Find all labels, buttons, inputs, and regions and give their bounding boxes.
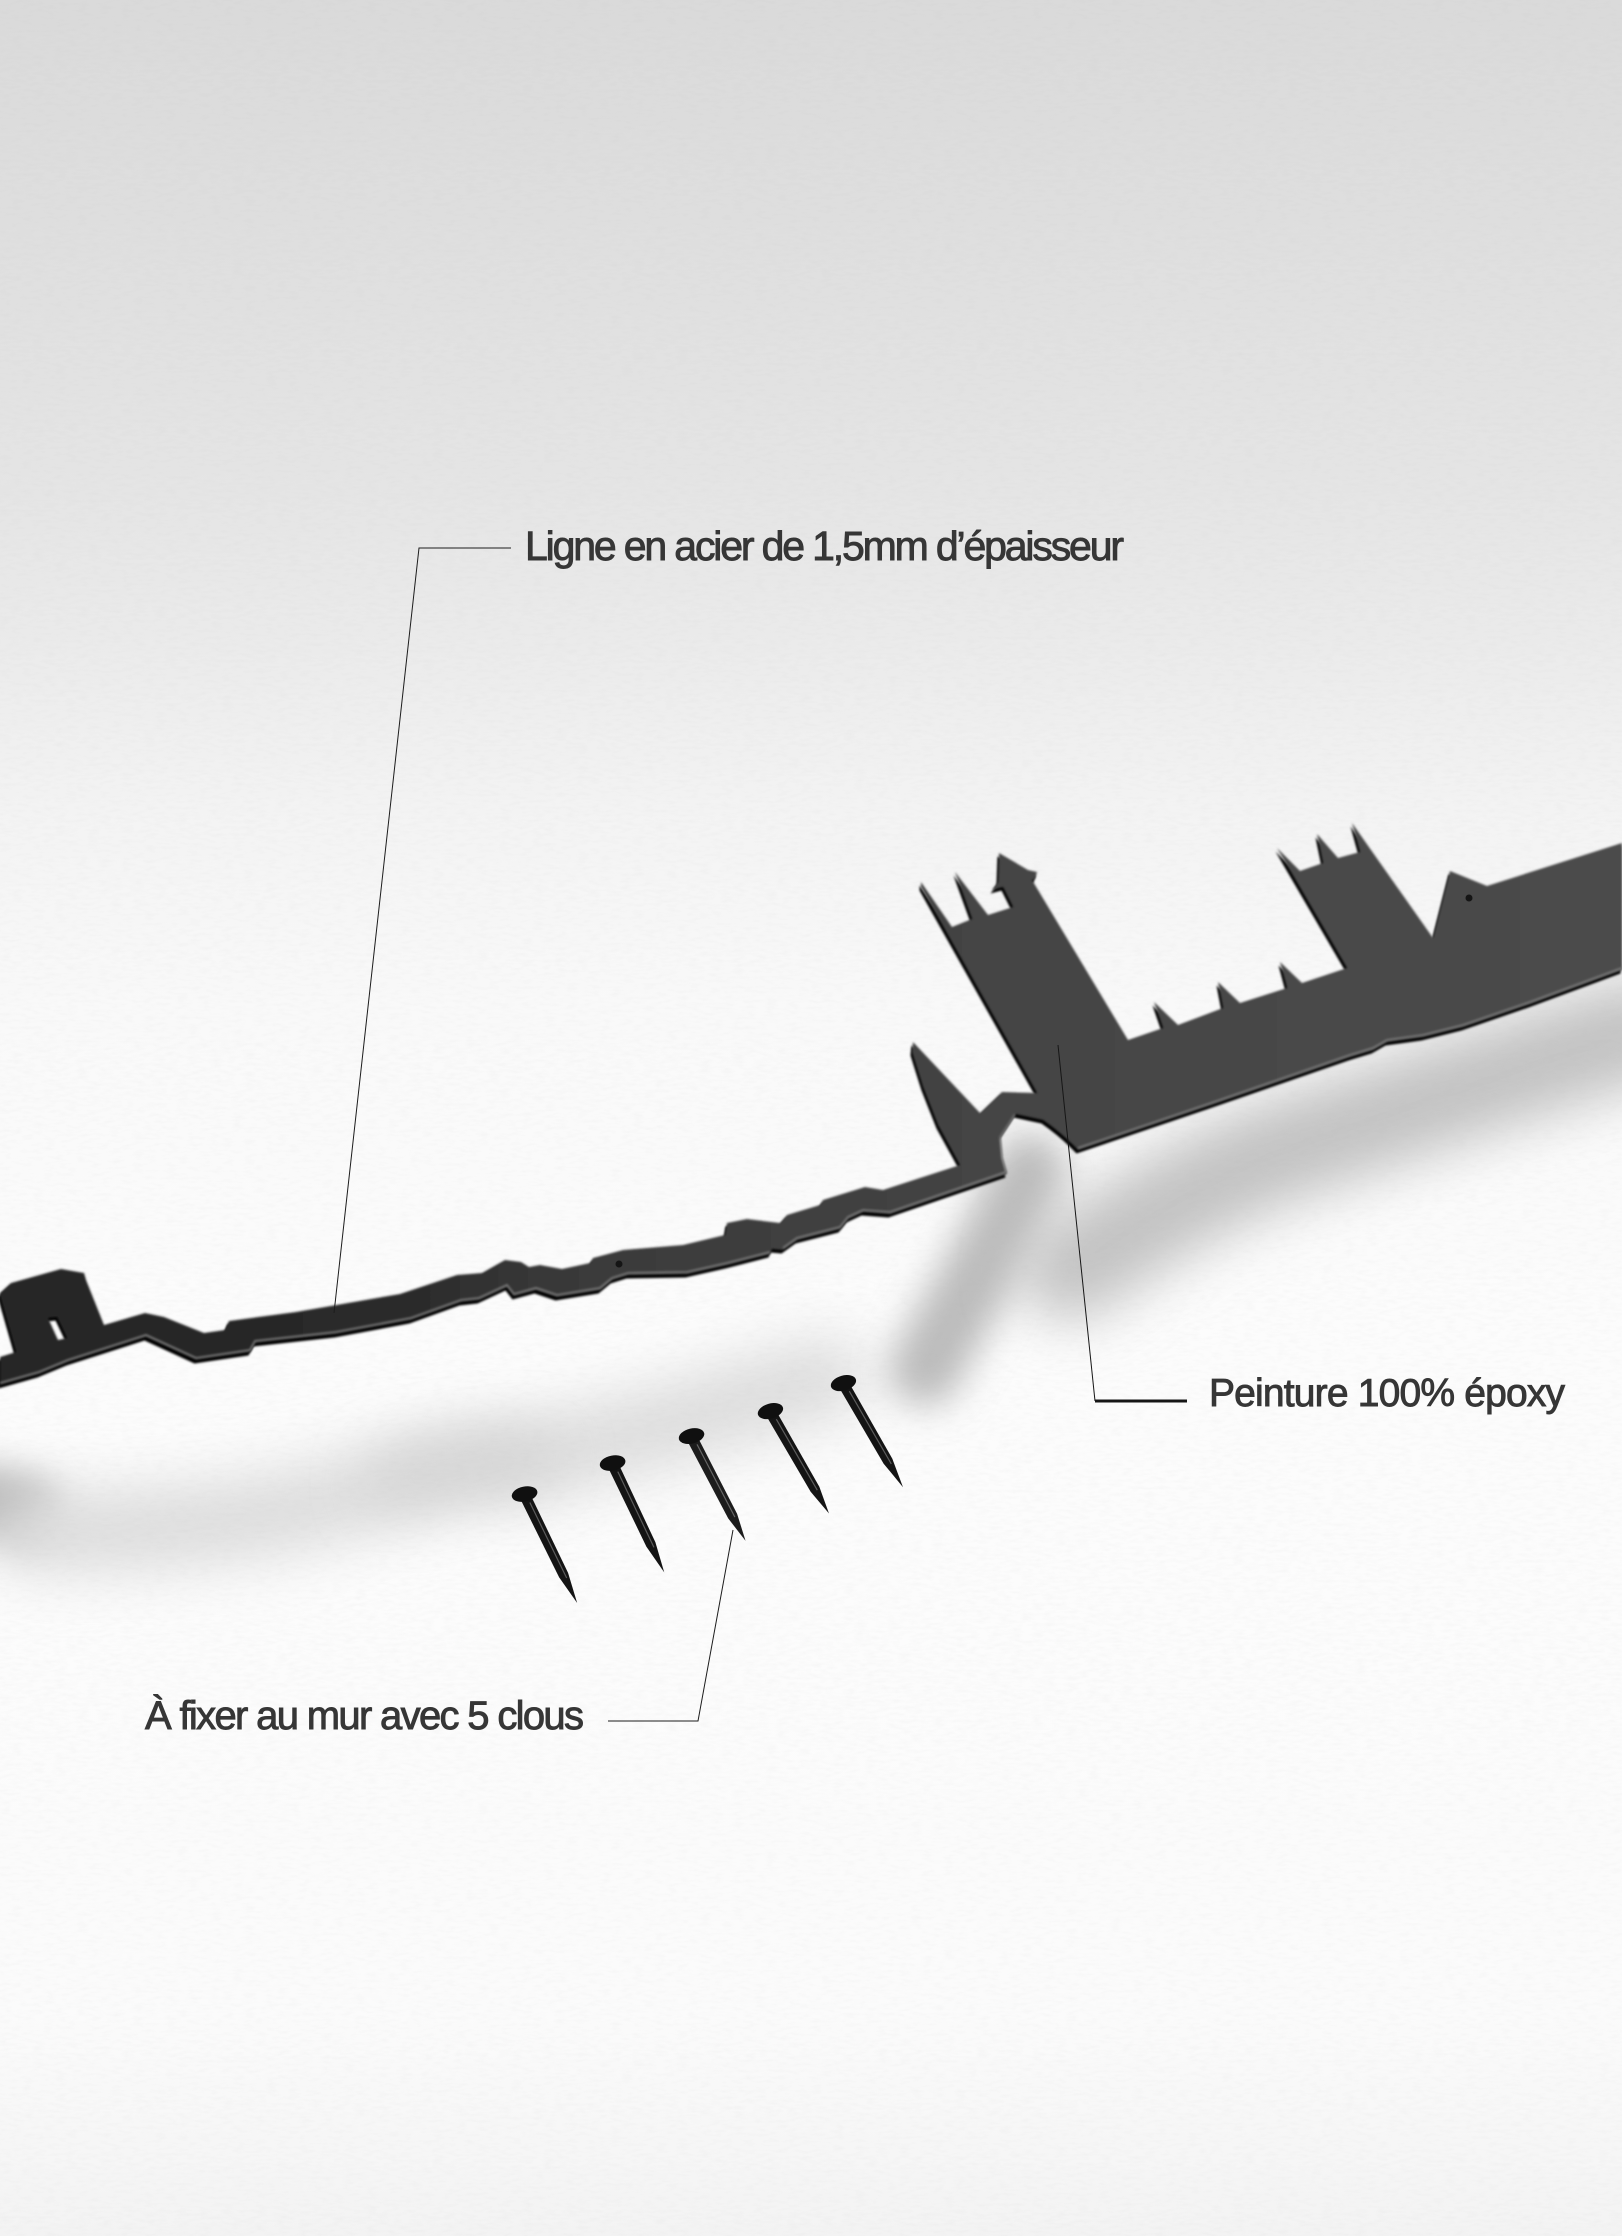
- nail 2: [595, 1447, 678, 1578]
- nail 4: [753, 1395, 842, 1520]
- steel skyline line: [0, 823, 1622, 1388]
- nail 1: [507, 1478, 591, 1609]
- edge highlight: [0, 968, 1622, 1383]
- label: nails: À fixer au mur avec 5 clous: [145, 1693, 584, 1738]
- label: steel thickness: Ligne en acier de 1,5mm d’épaisseur: [525, 523, 1124, 569]
- leader line: steel line: [334, 548, 511, 1313]
- cast shadows of the steel line: [0, 1030, 1622, 1531]
- leader line: epoxy paint: [1058, 1045, 1187, 1401]
- silhouette body: [0, 823, 1622, 1385]
- label: epoxy paint: Peinture 100% époxy: [1209, 1372, 1566, 1415]
- nails: [507, 1367, 916, 1609]
- edge shadow: [0, 826, 1620, 1388]
- nail 3: [674, 1420, 759, 1547]
- leader line: nails: [608, 1530, 733, 1721]
- mounting holes: [616, 894, 1472, 1268]
- nail 5: [826, 1367, 916, 1494]
